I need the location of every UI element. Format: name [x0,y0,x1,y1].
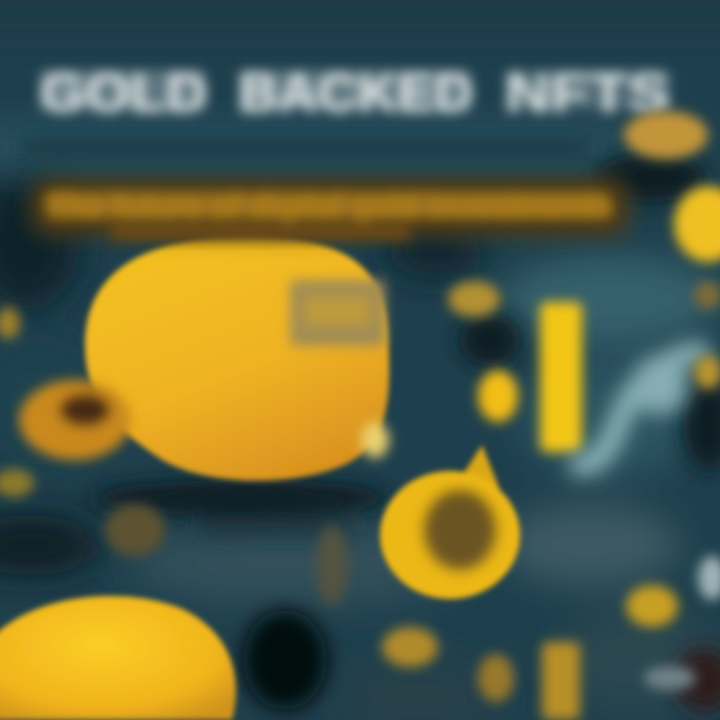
subtitle [30,178,630,240]
title: BACKED [238,61,474,124]
icon: coin right edge [674,186,720,262]
pot label [290,280,389,458]
icon: large coin bottom left [0,596,236,720]
subtitle: The future of digital gold investments [48,190,612,223]
title: GOLD [40,61,208,124]
icon: pot handle [19,380,131,460]
small coins [0,281,720,720]
line chart [580,352,700,465]
icon: ring coin [380,445,520,599]
title: NFTS [505,61,670,124]
icon: coin top right [624,111,708,159]
bar chart [478,302,582,452]
title [40,61,670,124]
icon: gold pot [85,236,389,481]
